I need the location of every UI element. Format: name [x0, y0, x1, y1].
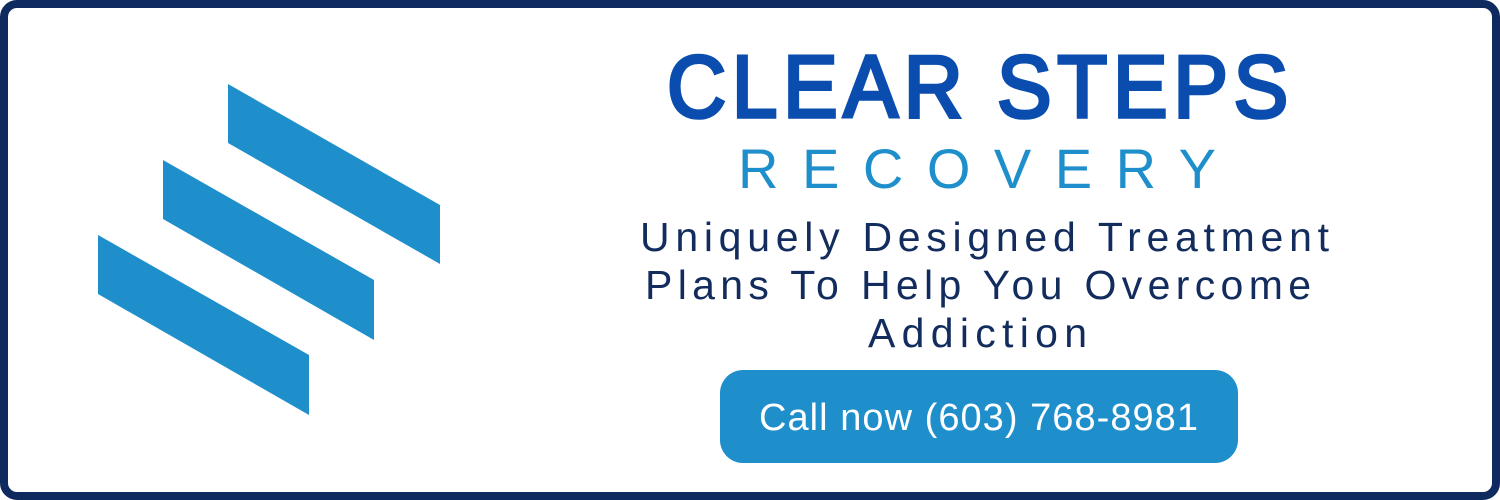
tagline: Plans To Help You Overcome: [645, 262, 1311, 308]
subtitle: Recovery: RECOVERY: [738, 137, 1216, 200]
call to action button: Call now (603) 768-8981: [759, 397, 1198, 439]
tagline: Addiction: [868, 310, 1087, 356]
title: Clear Steps: CLEAR STEPS: [667, 38, 1288, 137]
call to action button: [720, 370, 1238, 463]
icon: stair stripes logo: [98, 84, 440, 415]
tagline: Uniquely Designed Treatment: [640, 214, 1330, 260]
tagline: [640, 214, 1330, 356]
